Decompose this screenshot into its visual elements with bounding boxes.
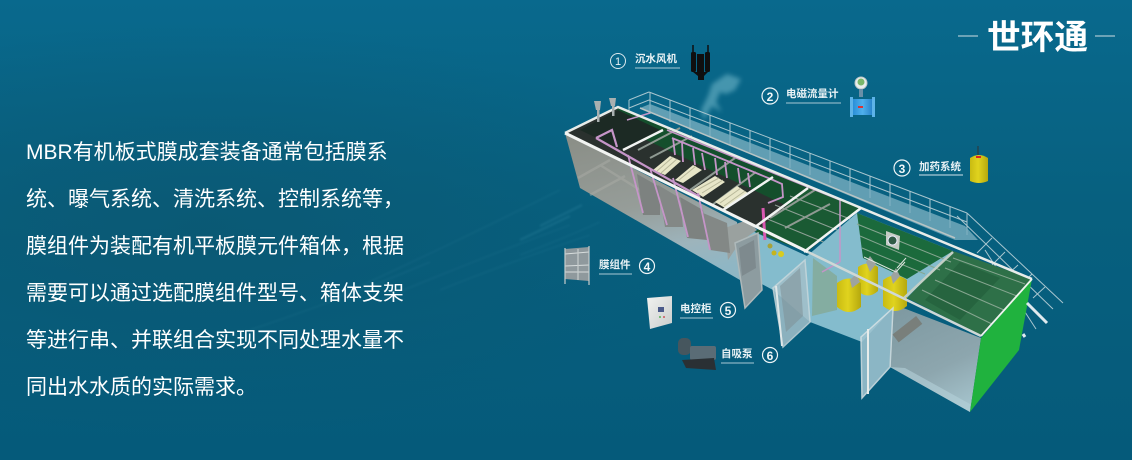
label: 5 control cabinet bbox=[680, 302, 736, 318]
white top frame bbox=[565, 107, 1032, 336]
open doors bbox=[735, 233, 922, 398]
label: 5 control cabinet: 电控柜 bbox=[680, 302, 712, 315]
tank front face bbox=[565, 133, 981, 412]
label: 5 control cabinet: 5 bbox=[725, 304, 732, 318]
icon: blower bbox=[691, 45, 710, 80]
label: 2 flowmeter: 电磁流量计 bbox=[786, 87, 839, 100]
icon: membrane module bbox=[565, 246, 589, 285]
stair ends bbox=[1023, 303, 1047, 337]
label: 1 submersible blower: 1 bbox=[615, 56, 621, 68]
walkway deck bbox=[640, 104, 978, 240]
description text: MBR有机板式膜成套装备通常包括膜系 bbox=[26, 141, 388, 164]
walkway and railing bbox=[629, 92, 1063, 329]
yellow dosing tanks bbox=[837, 256, 907, 312]
tank interior bbox=[565, 107, 861, 252]
tank bay walls bbox=[812, 213, 1032, 335]
label: 3 dosing system: 加药系统 bbox=[919, 160, 961, 173]
description text: 膜组件为装配有机平板膜元件箱体，根据 bbox=[26, 235, 404, 258]
label: 4 membrane module bbox=[599, 258, 654, 274]
vent pipes bbox=[594, 98, 616, 122]
membrane tops bbox=[653, 156, 748, 208]
back wall left section bbox=[612, 107, 861, 224]
icon: dosing tank bbox=[970, 146, 988, 183]
description text: 统、曝气系统、清洗系统、控制系统等， bbox=[26, 188, 404, 211]
icon: self-priming pump bbox=[678, 338, 716, 370]
label: 1 submersible blower: 沉水风机 bbox=[635, 52, 677, 65]
description text: 需要可以通过选配膜组件型号、箱体支架 bbox=[26, 282, 404, 305]
label: 6 self-priming pump: 6 bbox=[767, 349, 774, 363]
label: 3 dosing system bbox=[894, 160, 963, 176]
label: 6 self-priming pump: 自吸泵 bbox=[721, 347, 753, 360]
light-blue floor bbox=[737, 213, 953, 342]
label: 4 membrane module: 4 bbox=[644, 260, 651, 274]
green end panel bbox=[970, 279, 1032, 412]
logo: 世环通 bbox=[987, 19, 1088, 57]
label: 3 dosing system: 3 bbox=[899, 162, 906, 176]
label: 1 submersible blower bbox=[610, 52, 680, 68]
water splash bbox=[701, 74, 741, 120]
icon: flowmeter bbox=[850, 77, 875, 117]
middle section wall bbox=[755, 188, 861, 252]
description text bbox=[26, 141, 404, 399]
icon: control cabinet bbox=[647, 296, 672, 329]
label: 2 flowmeter bbox=[762, 87, 841, 104]
description text: 同出水水质的实际需求。 bbox=[26, 376, 257, 399]
label: 4 membrane module: 膜组件 bbox=[599, 258, 631, 271]
description text: 等进行串、并联组合实现不同处理水量不 bbox=[26, 329, 404, 352]
fan on wall bbox=[886, 231, 900, 250]
label: 6 self-priming pump bbox=[721, 347, 778, 363]
label: 2 flowmeter: 2 bbox=[767, 90, 774, 104]
pipes bbox=[596, 113, 840, 272]
membrane module bodies bbox=[637, 174, 730, 253]
